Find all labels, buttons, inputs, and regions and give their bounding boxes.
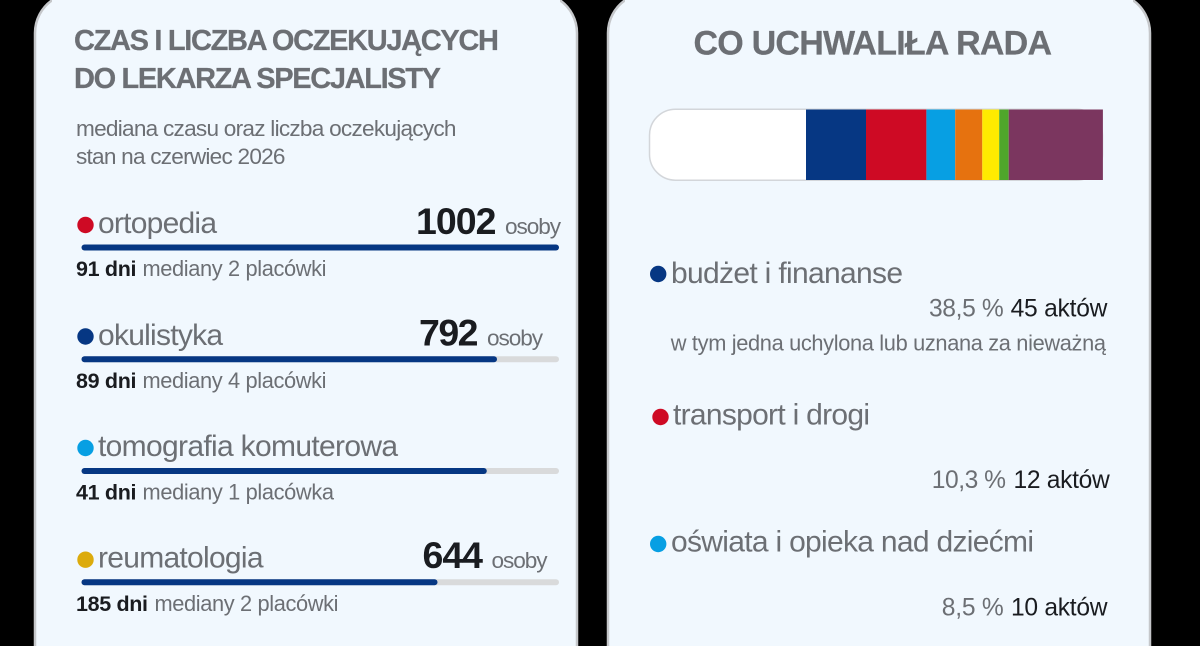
row: okulistyka: [76, 312, 559, 393]
item: budżet i finananse: 38,5 %: [929, 296, 1004, 323]
item: oświata i opieka nad dziećmi: 8,5 %: [942, 594, 1004, 621]
row: ortopedia: [76, 200, 562, 281]
item: oświata i opieka nad dziećmi: 10 aktów: [1011, 594, 1108, 621]
row: okulistyka: mediany 4 placówki: [142, 368, 326, 393]
item: budżet i finananse: w tym jedna uchylona lub uznana za nieważną: [670, 330, 1107, 355]
row: reumatologia: mediany 2 placówki: [154, 591, 338, 616]
item: budżet i finananse: 45 aktów: [1011, 296, 1108, 323]
heading: waiting time and number of patients: [74, 25, 499, 95]
item: oświata i opieka nad dziećmi: [650, 526, 1108, 621]
row: okulistyka: osoby: [487, 326, 544, 350]
panel: waiting time for specialists: [35, 0, 577, 646]
row: ortopedia: osoby: [505, 214, 562, 239]
item: oświata i opieka nad dziećmi: oświata i opieka nad dziećmi: [671, 526, 1034, 559]
stacked bar chart of council acts: [650, 109, 1103, 180]
row: reumatologia: 644: [422, 534, 483, 576]
row: okulistyka: 792: [419, 312, 478, 354]
item: transport i drogi: transport i drogi: [673, 398, 870, 432]
row: okulistyka: 89 dni: [76, 369, 136, 393]
row: reumatologia: 185 dni: [76, 592, 148, 616]
row: reumatologia: osoby: [492, 548, 548, 573]
subtitle: [76, 116, 456, 169]
panel: what the council passed: [608, 0, 1150, 646]
row: ortopedia: 1002: [416, 200, 496, 242]
item: transport i drogi: 12 aktów: [1014, 467, 1110, 494]
item: budżet i finananse: [650, 257, 1108, 355]
row: ortopedia: mediany 2 placówki: [142, 256, 326, 281]
heading: waiting time and number of patients: CZAS I LICZBA OCZEKUJĄCYCH: [74, 25, 499, 57]
subtitle: stan na czerwiec 2026: [76, 144, 286, 169]
row: ortopedia: 91 dni: [76, 257, 136, 281]
subtitle: mediana czasu oraz liczba oczekujących: [76, 116, 456, 141]
row: tomografia komuterowa: 41 dni: [76, 481, 136, 505]
heading: co uchwaliła rada: CO UCHWALIŁA RADA: [694, 24, 1052, 62]
item: budżet i finananse: budżet i finananse: [671, 257, 903, 290]
row: tomografia komuterowa: mediany 1 placówka: [142, 480, 335, 505]
row: reumatologia: [76, 534, 559, 616]
row: tomografia komuterowa: tomografia komuterowa: [98, 430, 398, 463]
row: ortopedia: ortopedia: [98, 207, 217, 240]
item: transport i drogi: [652, 398, 1110, 494]
heading: waiting time and number of patients: DO LEKARZA SPECJALISTY: [74, 63, 441, 95]
row: okulistyka: okulistyka: [98, 319, 223, 352]
item: transport i drogi: 10,3 %: [932, 467, 1006, 494]
row: tomografia komuterowa: [76, 430, 559, 505]
row: reumatologia: reumatologia: [98, 542, 264, 575]
